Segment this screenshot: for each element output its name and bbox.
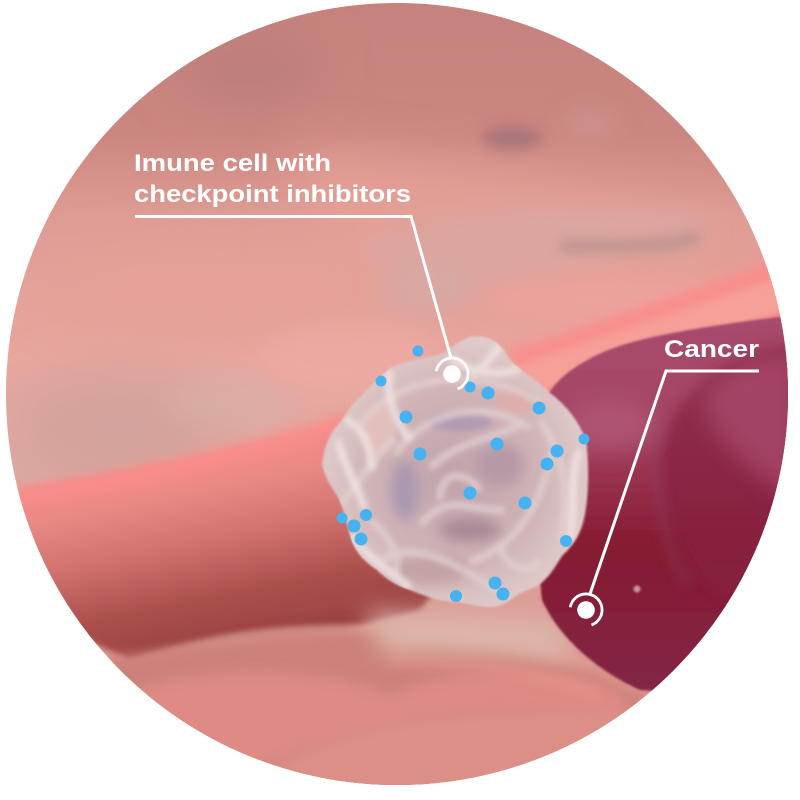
callout: immune cell label (134, 150, 468, 389)
marker (436, 358, 468, 389)
leader line (590, 371, 759, 594)
checkpoint inhibitors: blue dots (336, 346, 590, 602)
immune cell (322, 336, 588, 607)
marker (570, 594, 602, 625)
callout text: Cancer (664, 336, 759, 363)
callout text: Imune cell with (134, 150, 331, 177)
leader line (135, 216, 451, 358)
cancer mass (539, 314, 800, 700)
lower tissue folds (108, 597, 647, 785)
blood vessel (0, 262, 800, 660)
callout text: checkpoint inhibitors (134, 181, 411, 208)
callout: cancer label (570, 336, 759, 625)
